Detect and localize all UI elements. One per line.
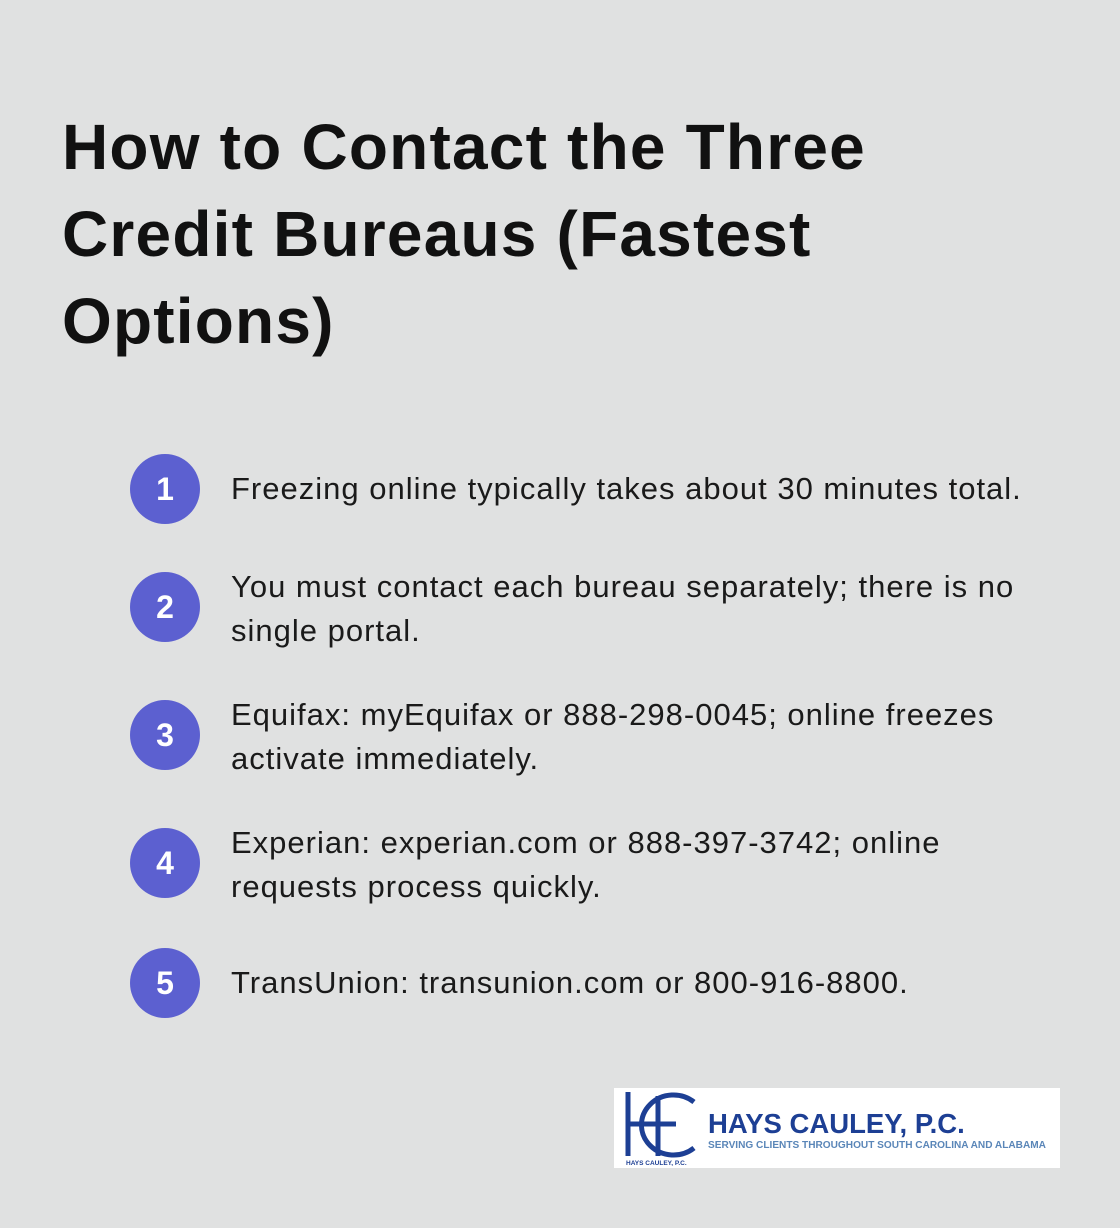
item 3: Equifax: myEquifax or 888-298-0045; online freezes	[231, 697, 994, 732]
item 2	[130, 569, 1014, 648]
item 5	[130, 948, 909, 1018]
item 3	[130, 697, 994, 776]
item 3: 3	[156, 717, 174, 753]
item 5: 5	[156, 965, 174, 1001]
item 3: activate immediately.	[231, 741, 539, 776]
item 1: 1	[156, 471, 174, 507]
logo	[614, 1088, 1060, 1168]
item 4: requests process quickly.	[231, 869, 602, 904]
item 1	[130, 454, 1022, 524]
item 4: Experian: experian.com or 888-397-3742; online	[231, 825, 940, 860]
item 2: single portal.	[231, 613, 421, 648]
item 5: TransUnion: transunion.com or 800-916-8800.	[231, 965, 909, 1000]
logo: SERVING CLIENTS THROUGHOUT SOUTH CAROLINA AND ALABAMA	[708, 1140, 1047, 1151]
item 2: 2	[156, 589, 174, 625]
title: Options)	[62, 285, 335, 357]
title	[62, 111, 866, 357]
item 2: You must contact each bureau separately; there is no	[231, 569, 1014, 604]
item 4	[130, 825, 940, 904]
icon: HC monogram	[628, 1092, 694, 1156]
title: How to Contact the Three	[62, 111, 866, 183]
logo: HAYS CAULEY, P.C.	[626, 1160, 687, 1167]
item 1: Freezing online typically takes about 30 minutes total.	[231, 471, 1022, 506]
title: Credit Bureaus (Fastest	[62, 198, 812, 270]
item 4: 4	[156, 845, 174, 881]
logo: HAYS CAULEY, P.C.	[708, 1108, 965, 1139]
